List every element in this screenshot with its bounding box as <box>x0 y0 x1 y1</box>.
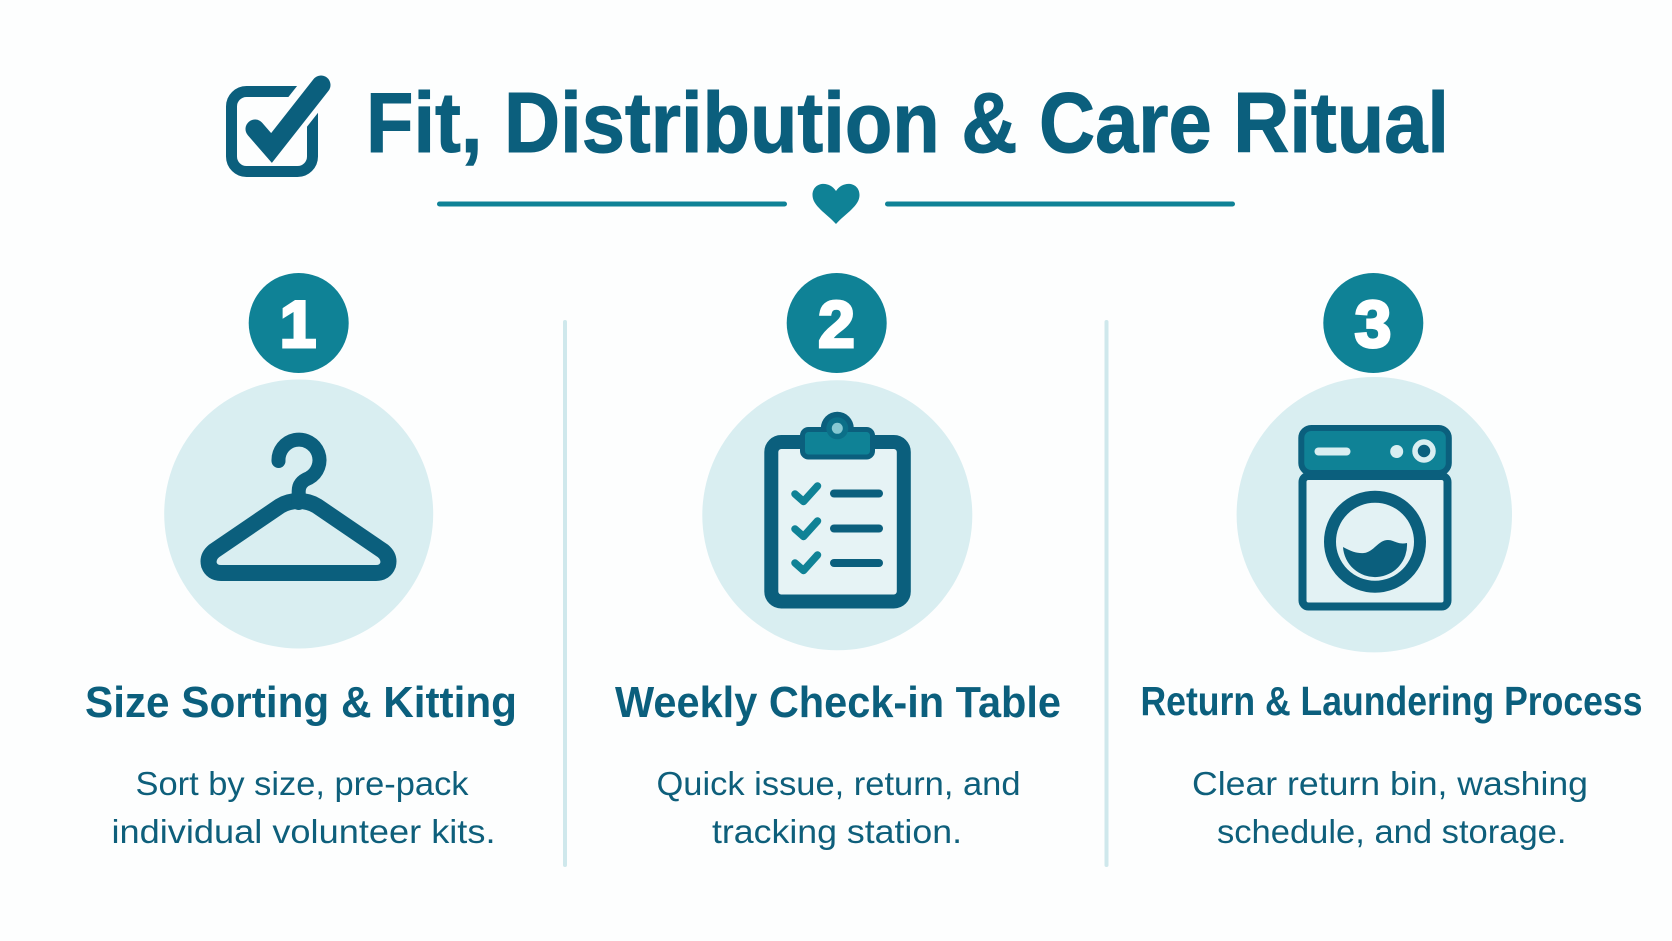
description <box>1192 765 1588 850</box>
description: individual volunteer kits. <box>112 813 496 850</box>
number badge 3 <box>1323 273 1423 373</box>
number badge 2 <box>787 273 887 373</box>
icon: clothes hanger <box>164 380 433 648</box>
panel: weekly check-in table <box>615 273 1061 850</box>
icon: clipboard checklist <box>702 380 972 650</box>
panel: return and laundering process <box>1140 273 1642 850</box>
description: Quick issue, return, and <box>656 765 1020 802</box>
number badge 1: 1 <box>280 287 316 361</box>
header <box>232 76 1449 224</box>
description: Sort by size, pre-pack <box>136 765 469 802</box>
icon: checkbox with check mark <box>232 83 321 172</box>
column divider 2 <box>1104 320 1108 867</box>
heading: Weekly Check-in Table <box>615 678 1061 727</box>
number badge 2: 2 <box>818 287 855 361</box>
description <box>112 765 496 850</box>
description: Clear return bin, washing <box>1192 765 1588 802</box>
description: tracking station. <box>712 813 962 850</box>
heading: Size Sorting & Kitting <box>85 678 517 727</box>
title: Fit, Distribution & Care Ritual <box>366 76 1449 171</box>
description <box>656 765 1020 850</box>
icon: washing machine <box>1237 377 1512 652</box>
panel: size sorting and kitting <box>85 273 517 850</box>
title divider with heart <box>437 184 1235 224</box>
description: schedule, and storage. <box>1217 813 1566 850</box>
number badge 1 <box>249 273 349 373</box>
number badge 3: 3 <box>1355 287 1391 361</box>
column divider 1 <box>563 320 567 867</box>
